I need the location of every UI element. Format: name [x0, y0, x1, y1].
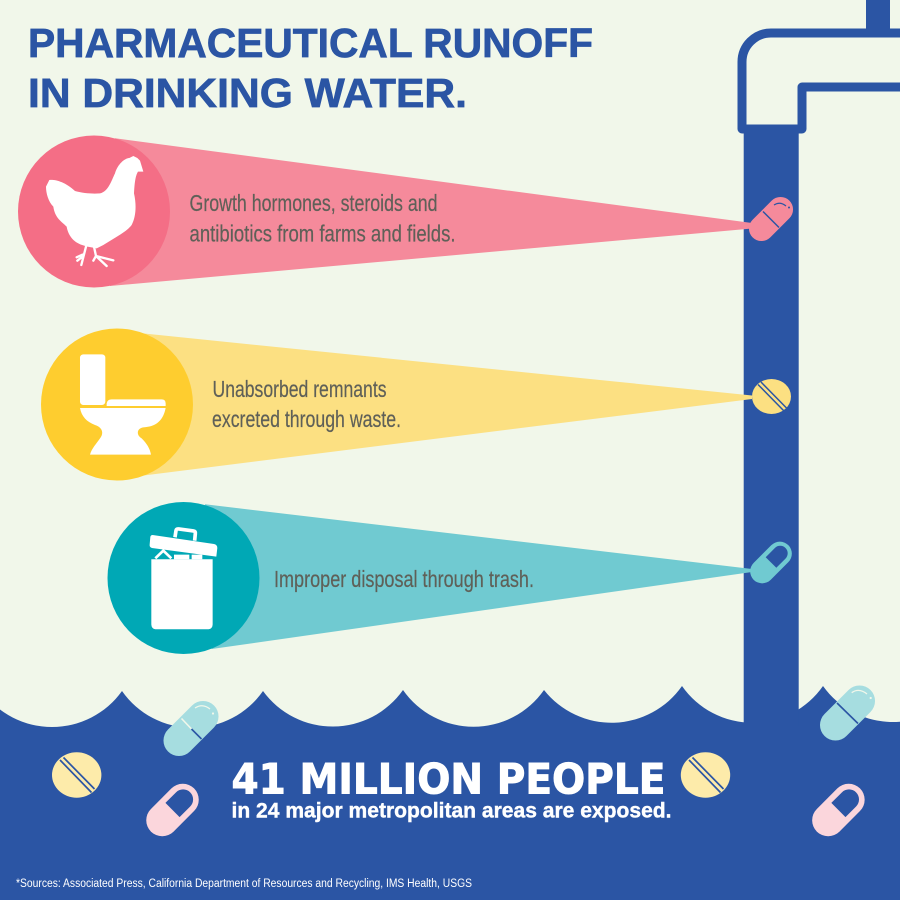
sources: *Sources: Associated Press, California Department of Resources and Recycling, IMS Health, USGS: [16, 878, 472, 890]
icon: hen: [46, 156, 143, 266]
icon: pale yellow tablet, left: [52, 752, 101, 798]
teal circle: [108, 502, 260, 654]
text: human waste: [212, 376, 401, 432]
text: trash disposal: Improper disposal through trash.: [274, 566, 534, 592]
title: PHARMACEUTICAL RUNOFF: [28, 20, 593, 66]
icon: yellow tablet in pipe: [752, 379, 791, 414]
yellow circle: [41, 328, 193, 480]
water: [0, 686, 900, 900]
panel: human waste: [41, 328, 752, 480]
yellow beam: [142, 333, 752, 476]
text: farm runoff: antibiotics from farms and fields.: [190, 220, 456, 246]
icon: light teal capsule, left: [157, 695, 225, 762]
icon: toilet: [80, 354, 166, 455]
text: farm runoff: [190, 190, 456, 246]
icon: light teal capsule, right: [814, 679, 881, 747]
text: farm runoff: Growth hormones, steroids and: [190, 190, 438, 216]
icon: trash can: [150, 529, 217, 629]
icon: pale yellow tablet, right: [681, 752, 730, 798]
statistic subtext: in 24 major metropolitan areas are exposed.: [232, 800, 672, 822]
pink beam: [110, 138, 752, 286]
icon: pink capsule in pipe: [744, 192, 798, 246]
text: human waste: Unabsorbed remnants: [212, 376, 386, 402]
icon: pale pink capsule, left: [140, 777, 205, 843]
headline statistic: 41 MILLION PEOPLE: [232, 754, 666, 803]
icon: pale pink capsule, right: [806, 777, 871, 843]
pink circle: [18, 136, 170, 288]
icon: teal capsule in pipe: [745, 537, 797, 588]
pipe: [742, 0, 900, 726]
panel: farm runoff: [18, 136, 752, 288]
text: human waste: excreted through waste.: [212, 406, 401, 432]
title: [28, 20, 593, 116]
title: IN DRINKING WATER.: [28, 70, 467, 116]
panel: trash disposal: [108, 502, 752, 654]
teal beam: [205, 504, 752, 649]
